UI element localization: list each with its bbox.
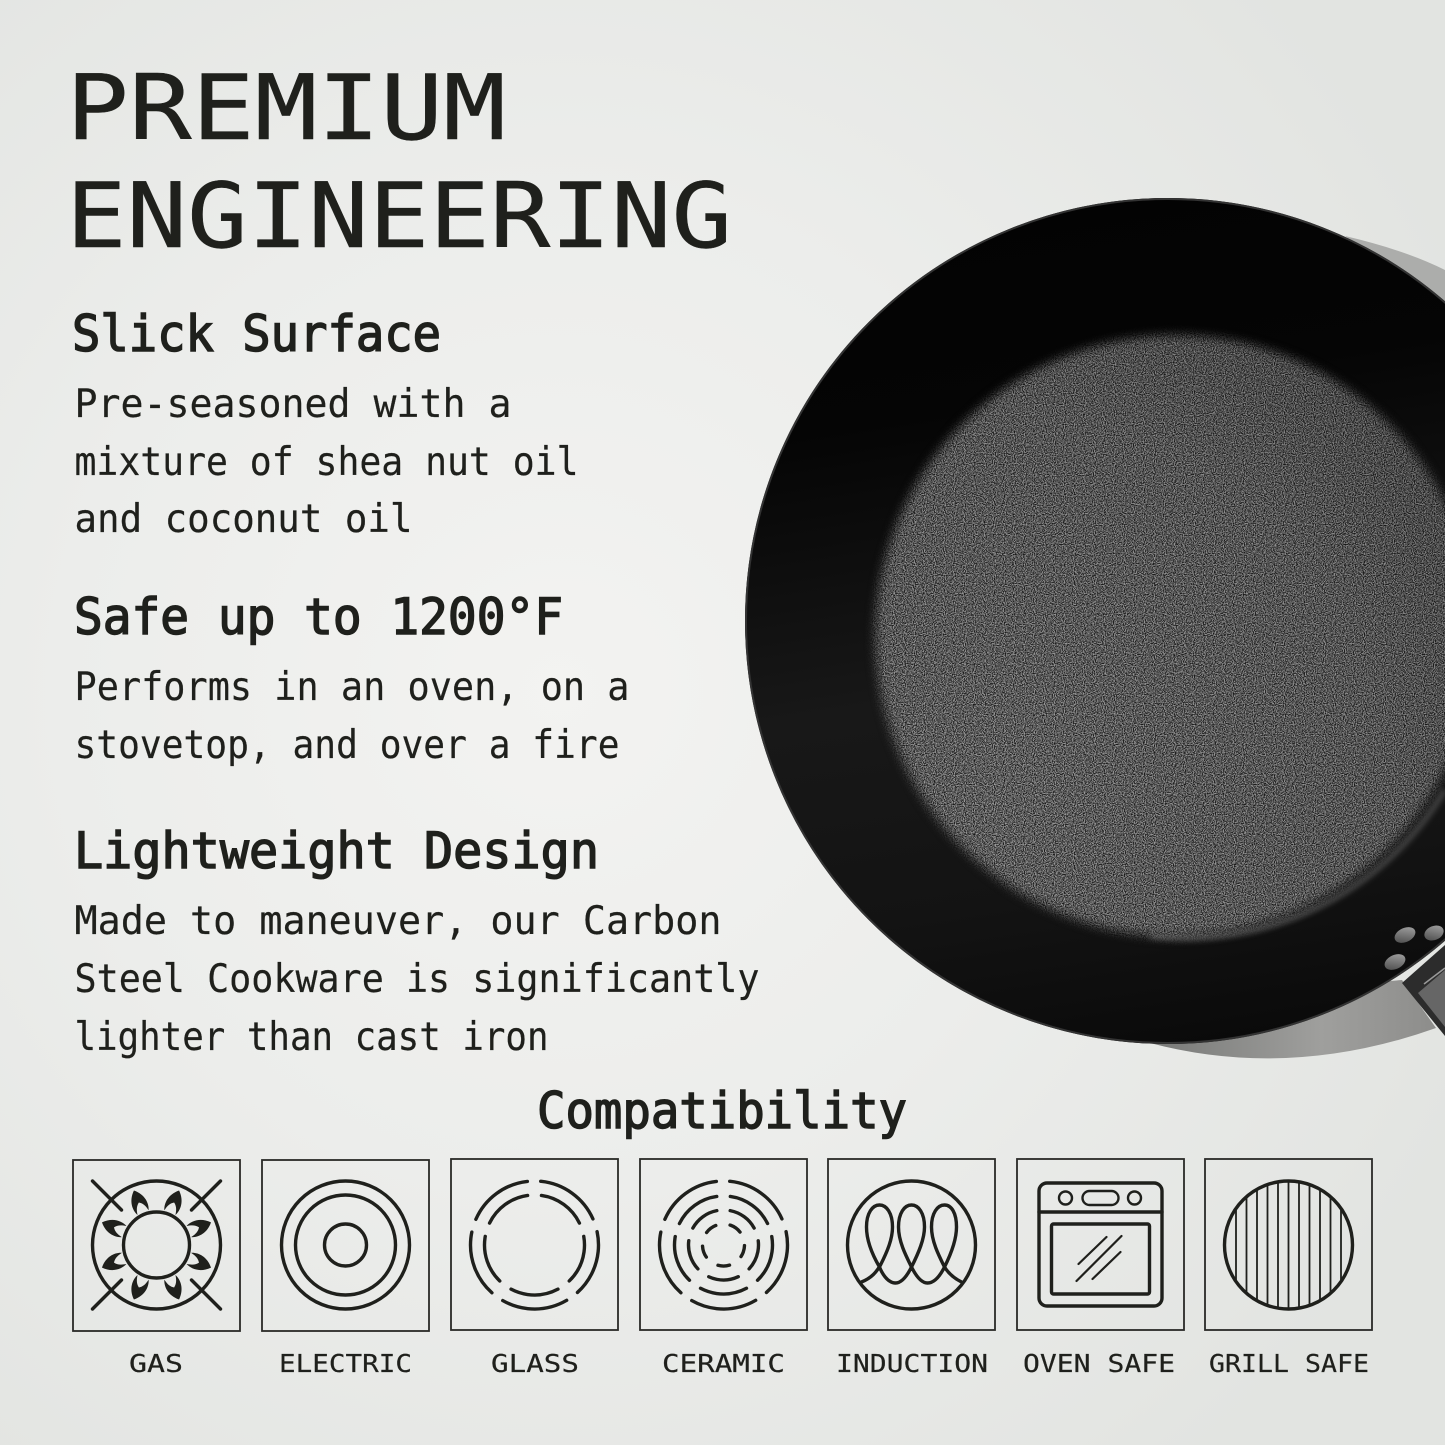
icon: gas burner xyxy=(92,1181,220,1309)
label: OVEN SAFE xyxy=(1023,1349,1175,1378)
heading: Lightweight Design xyxy=(74,822,599,880)
label: GAS xyxy=(129,1349,183,1378)
feature: safe up to 1200F xyxy=(74,588,630,768)
cooking surface xyxy=(875,335,1445,938)
pan rivets xyxy=(1382,923,1445,973)
description: Performs in an oven, on a xyxy=(74,665,630,710)
icon: induction coil xyxy=(848,1181,976,1309)
feature: lightweight design xyxy=(74,822,760,1060)
description: Made to maneuver, our Carbon xyxy=(74,899,722,944)
description: stovetop, and over a fire xyxy=(74,723,620,768)
icon: ceramic cooktop xyxy=(653,1175,794,1315)
label: GRILL SAFE xyxy=(1209,1349,1369,1378)
description xyxy=(74,899,760,1060)
compatibility: grill safe xyxy=(1205,1159,1372,1378)
description: and coconut oil xyxy=(74,497,412,542)
label: CERAMIC xyxy=(662,1349,785,1378)
compatibility: electric xyxy=(262,1160,429,1378)
icon: glass cooktop xyxy=(464,1175,605,1315)
heading: compatibility: Compatibility xyxy=(537,1082,907,1140)
icon: oven xyxy=(1039,1183,1162,1306)
icon: electric coil xyxy=(282,1181,410,1309)
title: PREMIUM xyxy=(66,56,506,161)
description: Steel Cookware is significantly xyxy=(74,957,760,1002)
title: ENGINEERING xyxy=(66,164,732,269)
compatibility: oven safe xyxy=(1017,1159,1184,1378)
description xyxy=(74,665,630,768)
pan body xyxy=(745,198,1445,1044)
pan shadow xyxy=(1150,236,1445,1058)
description: mixture of shea nut oil xyxy=(74,440,578,485)
feature: slick surface xyxy=(72,305,578,542)
compatibility: gas xyxy=(73,1160,240,1378)
title xyxy=(66,56,732,269)
label: GLASS xyxy=(491,1349,579,1378)
pan handle xyxy=(1402,945,1445,1036)
compatibility: induction xyxy=(828,1159,995,1378)
description: lighter than cast iron xyxy=(74,1015,548,1060)
compatibility: ceramic xyxy=(640,1159,807,1378)
label: INDUCTION xyxy=(836,1349,988,1378)
compatibility: glass xyxy=(451,1159,618,1378)
label: ELECTRIC xyxy=(279,1349,412,1378)
icon: grill grate xyxy=(1224,1181,1352,1309)
heading: Slick Surface xyxy=(72,305,441,363)
description xyxy=(74,382,578,542)
heading: Safe up to 1200°F xyxy=(74,588,563,646)
description: Pre-seasoned with a xyxy=(74,382,512,427)
photo: carbon steel pan xyxy=(745,198,1445,1058)
